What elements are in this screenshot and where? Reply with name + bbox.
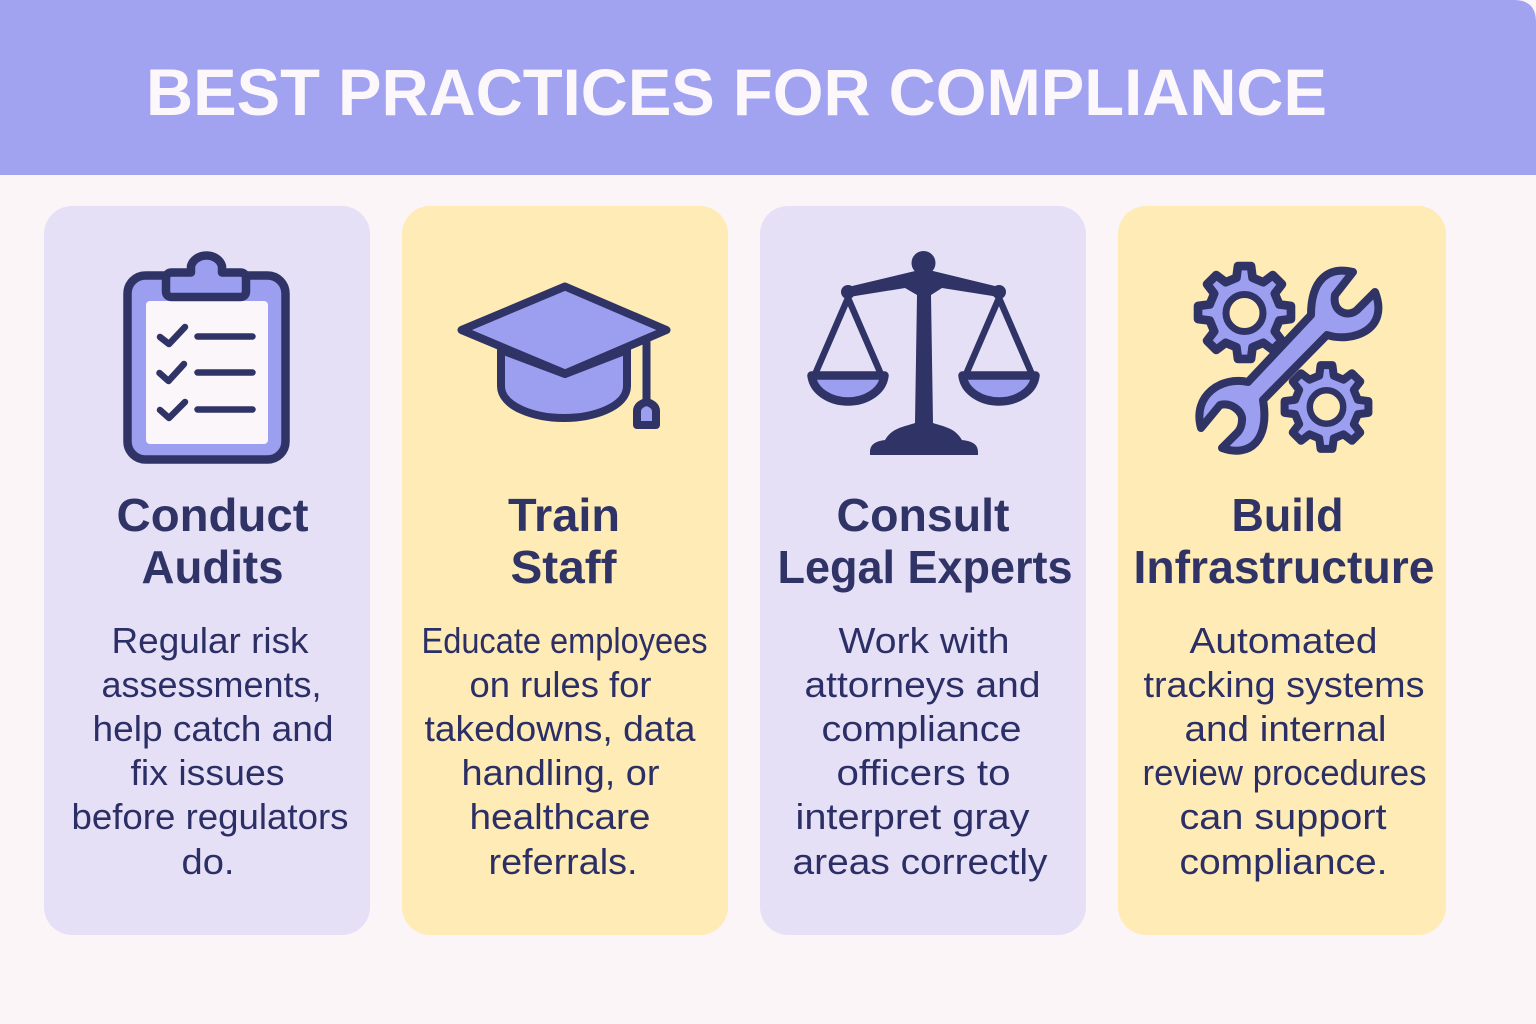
icon: gears and wrench [1198,266,1378,451]
text: train staff [422,620,708,882]
text: build infrastructure: Automated [1190,620,1378,661]
text: consult legal experts [792,620,1048,882]
heading: conduct audits: Audits [142,541,284,593]
text: consult legal experts: attorneys and [804,664,1040,705]
text: consult legal experts: areas correctly [792,841,1048,882]
heading: build infrastructure [1134,489,1434,593]
icon: clipboard [128,255,286,460]
icon: graduation cap [462,286,666,425]
text: consult legal experts: compliance [822,708,1022,749]
icon: scales of justice [812,251,1036,455]
text: train staff: Educate employees [422,620,708,661]
text: train staff: healthcare [470,796,650,837]
text: build infrastructure: can support [1180,796,1386,837]
heading: train staff: Train [508,489,620,541]
text: build infrastructure: tracking systems [1144,664,1424,705]
text: conduct audits: do. [182,841,234,882]
text: conduct audits: before regulators [72,796,348,837]
text: build infrastructure: compliance. [1180,841,1388,882]
text: train staff: on rules for [470,664,652,705]
text: build infrastructure: review procedures [1142,752,1426,793]
heading: train staff [508,489,620,593]
text: train staff: referrals. [488,841,638,882]
text: train staff: takedowns, data [424,708,697,749]
panel: build infrastructure [1118,206,1446,935]
heading: build infrastructure: Build [1232,489,1344,541]
text: build infrastructure: and internal [1184,708,1386,749]
text: conduct audits: Regular risk [112,620,310,661]
panel: train staff [402,206,728,935]
text: consult legal experts: officers to [836,752,1010,793]
text: consult legal experts: interpret gray [796,796,1030,837]
text: build infrastructure [1142,620,1426,882]
text: train staff: handling, or [462,752,660,793]
heading: consult legal experts [778,489,1072,593]
heading: train staff: Staff [510,541,617,593]
heading: conduct audits: Conduct [116,489,308,541]
text: conduct audits: help catch and [92,708,334,749]
text: conduct audits: fix issues [130,752,284,793]
heading: consult legal experts: Legal Experts [778,541,1072,593]
text: conduct audits [72,620,348,882]
text: consult legal experts: Work with [838,620,1010,661]
heading: conduct audits [116,489,308,593]
heading: build infrastructure: Infrastructure [1134,541,1434,593]
text: conduct audits: assessments, [102,664,322,705]
heading: consult legal experts: Consult [836,489,1010,541]
panel: conduct audits [44,206,370,935]
title: BEST PRACTICES FOR COMPLIANCE [146,55,1327,129]
header banner [0,0,1536,175]
panel: consult legal experts [760,206,1086,935]
